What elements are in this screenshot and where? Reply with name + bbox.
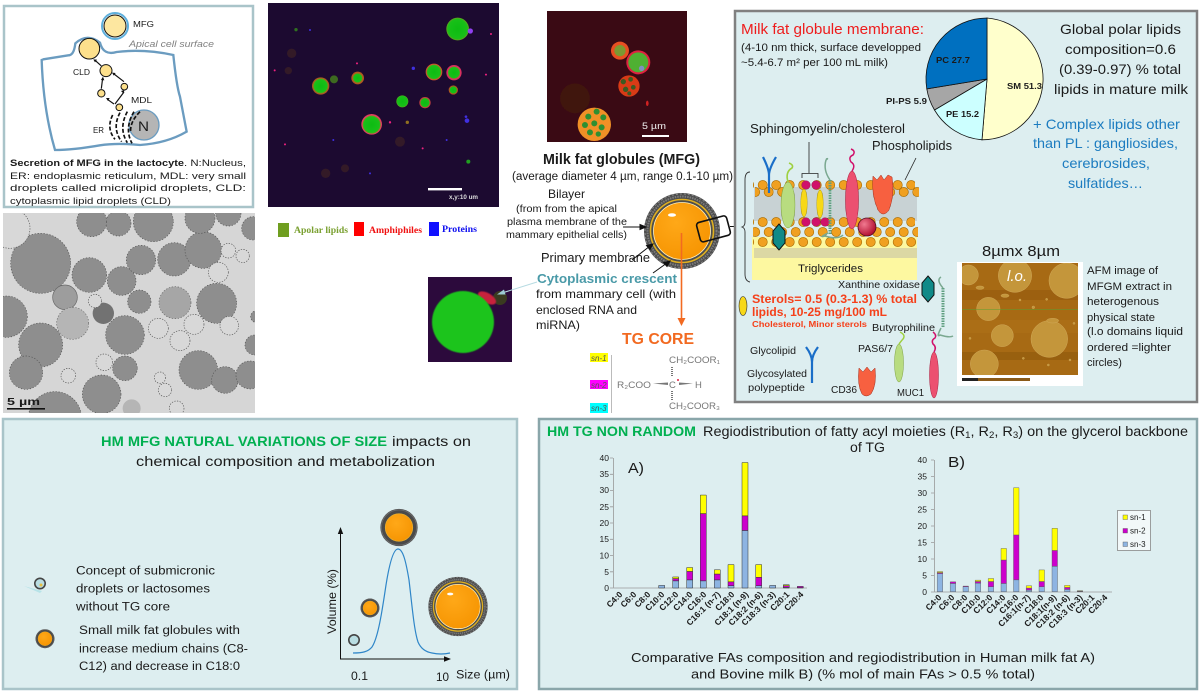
text: membrane facts	[741, 42, 921, 69]
chart B: bovine milk: 35	[918, 472, 927, 482]
heading: TG non random: HM TG NON RANDOM	[547, 424, 696, 439]
key: membrane proteins: MUC1	[897, 387, 924, 399]
diagram: triglyceride stereo formula	[590, 353, 720, 413]
chart B: bovine milk: C18:1(n-9)	[1022, 592, 1059, 629]
heading: TG non random: of TG	[850, 440, 885, 455]
text: AFM caption: physical state	[1087, 312, 1155, 324]
chart A: human milk fat: C12:0	[657, 589, 681, 613]
text: chart footnote	[631, 650, 1095, 682]
text: AFM caption: AFM image of	[1087, 265, 1159, 277]
icon: small milk fat globule	[36, 629, 54, 648]
text: chart footnote: and Bovine milk B) (% mol of main FAs > 0.5 % total)	[691, 666, 1035, 682]
key: membrane proteins: PAS6/7	[858, 343, 893, 355]
chart: size distribution: 10	[436, 672, 449, 684]
bracket	[742, 172, 750, 282]
heading: membrane: Milk fat globule membrane:	[741, 21, 924, 38]
heading: TG non random	[547, 424, 1188, 455]
text: membrane facts: ~5.4-6.7 m² per 100 mL milk)	[741, 57, 888, 69]
labels: cell parts: N	[138, 118, 149, 134]
heading: variations of size: HM MFG NATURAL VARIATIONS OF SIZE	[101, 434, 387, 449]
chart B: bovine milk: 20	[918, 521, 927, 531]
chart B: bovine milk: C10:0	[959, 592, 983, 616]
heading: variations of size: impacts on	[392, 434, 471, 449]
text: AFM caption: MFGM extract in	[1087, 281, 1172, 293]
text: small globules: increase medium chains (C8-	[79, 644, 248, 656]
icon: released milk fat globule: MFG	[133, 19, 154, 29]
diagram: triglyceride stereo formula: sn-3	[591, 404, 607, 413]
globule: submicronic	[349, 635, 359, 645]
chart A: human milk fat: C20:1	[768, 589, 792, 613]
labels: membrane components: Phospholipids	[872, 139, 952, 153]
heading: TG core: TG CORE	[622, 331, 694, 348]
text: small globules	[79, 625, 248, 673]
chart A: human milk fat: 35	[600, 469, 609, 479]
chart A: human milk fat: 20	[600, 518, 609, 528]
chart: size distribution: Size (µm)	[456, 670, 510, 682]
text: cytoplasmic crescent: enclosed RNA and	[536, 303, 637, 317]
chart A: human milk fat: C14:0	[671, 589, 695, 613]
labels: bilayer: plasma membrane of the	[507, 216, 627, 228]
pie chart: polar lipids: SM 51.3	[1007, 81, 1042, 91]
chart A: human milk fat: C18:0	[713, 589, 737, 613]
labels: bilayer: Bilayer	[548, 187, 585, 201]
chart A: human milk fat: C10:0	[643, 589, 667, 613]
chart B: bovine milk: B)	[948, 454, 965, 471]
key: membrane proteins: Xanthine oxidase	[838, 279, 920, 291]
icon: released milk fat globule	[102, 13, 154, 39]
legend: apolar lipids, amphiphiles, proteins: Apolar lipids	[294, 226, 348, 236]
PAS6/7 protein	[781, 163, 795, 228]
chart B: bovine milk: C20:4	[1086, 592, 1110, 616]
icon: submicronic droplet	[24, 578, 45, 593]
diagram: triglyceride stereo formula: H	[695, 380, 702, 391]
key: membrane proteins	[747, 276, 953, 399]
chart B: bovine milk: C8:0	[949, 592, 970, 612]
diagram: triglyceride stereo formula: sn-2	[591, 381, 607, 390]
diagram: triglyceride stereo formula: C	[669, 380, 676, 391]
confocal image: large field	[268, 3, 499, 207]
chart B: bovine milk: C14:0	[984, 592, 1008, 616]
heading: TG non random: , R	[994, 424, 1013, 439]
chart A: human milk fat: 25	[600, 502, 609, 512]
heading: TG non random: 3	[1013, 430, 1018, 440]
labels: cell parts: CLD	[73, 67, 90, 77]
legend: apolar lipids, amphiphiles, proteins	[278, 222, 477, 237]
text: AFM caption: ordered =lighter	[1087, 342, 1171, 354]
chart A: human milk fat: A)	[628, 460, 644, 477]
sphingomyelin heads	[802, 181, 829, 226]
AFM image	[957, 259, 1084, 386]
diagram: membrane bilayer: Triglycerides	[798, 263, 864, 275]
chart A: human milk fat: 5	[604, 567, 609, 577]
diagram: membrane bilayer	[752, 149, 919, 280]
text: complex lipids: than PL : gangliosides,	[1033, 135, 1178, 151]
cholesterol ovals	[801, 189, 823, 218]
text: small globules: Small milk fat globules with	[79, 625, 240, 637]
chart B: bovine milk: 15	[918, 538, 927, 548]
labels: bilayer: Primary membrane	[541, 251, 650, 265]
chart A: human milk fat: C18:1 (n-9)	[712, 589, 751, 627]
chart: size distribution: Volume (%)	[325, 569, 339, 634]
text: AFM caption: (l.o domains liquid	[1087, 326, 1183, 338]
globule: small	[360, 598, 380, 618]
text: cytoplasmic crescent: miRNA)	[536, 318, 580, 332]
chart A: human milk fat	[600, 453, 807, 627]
caption: Secretion of MFG in the lactocyte	[10, 158, 184, 169]
heading: milk fat globules: (average diameter 4 µm, range 0.1-10 µm)	[512, 171, 733, 183]
chart A: human milk fat: C16:0	[685, 589, 709, 613]
chart B: bovine milk: C18:0	[1022, 592, 1046, 616]
diagram: triglyceride stereo formula: R₂COO	[617, 380, 651, 391]
chart: size distribution	[325, 509, 510, 684]
scale bar: 5 µm: 5 µm	[642, 121, 666, 132]
pie chart: polar lipids: PI-PS 5.9	[886, 96, 927, 106]
heading: variations of size: chemical composition and metabolization	[136, 454, 435, 469]
text: submicronic droplets: without TG core	[75, 602, 170, 614]
labels: bilayer: mammary epithelial cells)	[506, 229, 627, 241]
chart A: human milk fat: C8:0	[632, 589, 653, 609]
arrow: to TG core	[678, 233, 686, 326]
chart A: human milk fat: 15	[600, 534, 609, 544]
heading: milk fat globules	[512, 151, 733, 183]
heading: milk fat globules: Milk fat globules (MFG)	[543, 151, 700, 168]
text: submicronic droplets: droplets or lactosomes	[76, 584, 210, 596]
small confocal image with crescent	[428, 277, 512, 362]
text: complex lipids	[1033, 116, 1180, 191]
pie chart: polar lipids: PC 27.7	[936, 55, 970, 65]
legend: apolar lipids, amphiphiles, proteins: Amphiphiles	[369, 226, 422, 236]
text: AFM caption	[1087, 265, 1183, 369]
text: complex lipids: + Complex lipids other	[1033, 116, 1180, 132]
key: membrane proteins: Butyrophiline	[872, 322, 935, 334]
text: submicronic droplets: Concept of submicronic	[76, 566, 215, 578]
chart A: human milk fat: 30	[600, 485, 609, 495]
xanthine oxidase	[773, 224, 785, 250]
chart B: bovine milk: 30	[918, 488, 927, 498]
text: cytoplasmic crescent: from mammary cell (with	[536, 287, 676, 301]
scale bar: 5 µm: 5 µm	[7, 396, 40, 408]
heading: variations of size	[101, 434, 471, 469]
electron micrograph	[3, 213, 255, 413]
arrows: membrane pointers	[623, 224, 670, 273]
text: small globules: C12) and decrease in C18:0	[79, 661, 240, 673]
chart A: human milk fat: C6:0	[618, 589, 639, 609]
chart B: bovine milk: 0	[922, 587, 927, 597]
key: membrane proteins: polypeptide	[748, 382, 805, 394]
chart B: bovine milk: 5	[922, 570, 927, 580]
heading: TG non random: Regiodistribution of fatty acyl moieties (R	[703, 424, 948, 439]
chart A: human milk fat: C18:2 (n-6)	[726, 589, 765, 627]
caption: cytoplasmic lipid droplets (CLD)	[10, 196, 171, 207]
heading: TG non random: ) on the glycerol backbone	[1018, 424, 1188, 439]
confocal image: globules with red membrane	[547, 11, 687, 142]
red protein	[858, 218, 876, 236]
chart A: human milk fat: C16:1 (n-7)	[684, 589, 723, 627]
chart A: human milk fat: 10	[600, 550, 609, 560]
text: cytoplasmic crescent: Cytoplasmic crescent	[537, 272, 678, 286]
scale bar: 5 µm	[7, 398, 45, 410]
text: membrane facts: (4-10 nm thick, surface developped	[741, 42, 921, 54]
labels: cell parts: ER	[93, 125, 104, 135]
zoom box and connector to membrane	[696, 215, 745, 243]
chart B: bovine milk: 40	[918, 455, 927, 465]
text: global polar lipids	[1054, 21, 1189, 97]
legend: apolar lipids, amphiphiles, proteins: Proteins	[442, 225, 477, 235]
scale bar: 10 µm: x,y:10 um	[449, 195, 478, 201]
diagram: milk fat globule cross section	[644, 193, 720, 269]
labels: cell parts: MDL	[131, 95, 152, 105]
text: sterols: Sterols= 0.5 (0.3-1.3) % total	[752, 294, 917, 306]
text: global polar lipids: Global polar lipids	[1060, 21, 1181, 37]
diagram: lactocyte cell	[42, 38, 187, 150]
butyrophilin	[822, 159, 843, 238]
text: AFM caption: heterogenous	[1087, 296, 1160, 308]
text: global polar lipids: (0.39-0.97) % total	[1059, 61, 1181, 77]
legend: sn positions	[1118, 510, 1150, 550]
panel: natural variations of size	[3, 419, 517, 689]
labels: cell parts	[73, 67, 152, 135]
legend: sn positions: sn-2	[1130, 526, 1146, 536]
chart B: bovine milk: C16:0	[997, 592, 1021, 616]
labels: bilayer	[506, 187, 650, 265]
chart B: bovine milk: C12:0	[971, 592, 995, 616]
diagram: triglyceride stereo formula: CH₂COOR₃	[669, 401, 720, 412]
legend: sn positions: sn-1	[1130, 513, 1146, 522]
heading: TG non random: , R	[971, 424, 989, 439]
caption: droplets called microlipid droplets, CLD:	[10, 183, 246, 194]
diagram: triglyceride stereo formula: sn-1	[591, 354, 607, 363]
text: complex lipids: cerebrosides,	[1062, 155, 1150, 171]
glycosylated polypeptide	[763, 157, 776, 193]
CD36	[873, 175, 893, 214]
MUC1	[846, 149, 858, 229]
text: complex lipids: sulfatides…	[1068, 175, 1143, 191]
chart: size distribution: 0.1	[351, 671, 368, 683]
heading: TG non random: 2	[989, 430, 994, 440]
chart A: human milk fat: C20:4	[782, 589, 806, 613]
heading: AFM size: 8µmx 8µm	[982, 243, 1060, 260]
text: chart footnote: Comparative FAs composition and regiodistribution in Human milk fat A)	[631, 650, 1095, 665]
text: global polar lipids: lipids in mature milk	[1054, 81, 1189, 97]
labels: membrane components	[750, 122, 952, 180]
text: sterols: Cholesterol, Minor sterols	[752, 319, 867, 329]
text: sterols: lipids, 10-25 mg/100 mL	[752, 307, 887, 319]
pie chart: polar lipids: PE 15.2	[946, 109, 979, 119]
chart A: human milk fat: C18:3 (n-3)	[739, 589, 778, 627]
chart B: bovine milk: 10	[918, 554, 927, 564]
scale bar: 10 µm	[428, 188, 478, 201]
chart B: bovine milk: C20:1	[1073, 592, 1097, 616]
chart B: bovine milk: C4:0	[923, 592, 944, 612]
chart B: bovine milk: C6:0	[936, 592, 957, 612]
chart B: bovine milk: C16:1(n-7)	[996, 592, 1033, 629]
arrow: crescent pointer	[497, 282, 537, 294]
panel: secretion in the lactocyte	[4, 6, 253, 207]
text: AFM caption: circles)	[1087, 357, 1122, 369]
caption: ER: endoplasmic reticulum, MDL: very small	[10, 171, 246, 182]
chart A: human milk fat: 40	[600, 453, 609, 463]
chart A: human milk fat: 0	[604, 583, 609, 593]
diagram: triglyceride stereo formula: CH₂COOR₁	[669, 355, 720, 366]
text: sterols	[739, 294, 917, 329]
panel: milk fat globule membrane	[735, 11, 1197, 402]
text: submicronic droplets	[75, 566, 215, 614]
caption: . N:Nucleus,	[184, 158, 246, 169]
chart B: bovine milk: 25	[918, 504, 927, 514]
caption	[10, 158, 246, 207]
key: membrane proteins: Glycosylated	[747, 368, 807, 380]
labels: bilayer: (from from the apical	[516, 203, 617, 215]
chart B: bovine milk	[918, 454, 1112, 630]
AFM image: l.o.	[1007, 268, 1027, 285]
legend: sn positions: sn-3	[1130, 540, 1146, 549]
labels: membrane components: Sphingomyelin/cholesterol	[750, 122, 905, 136]
pie chart: polar lipids	[886, 18, 1043, 140]
key: membrane proteins: Glycolipid	[750, 345, 796, 357]
heading: TG non random: 1	[965, 430, 971, 440]
panel: TG non random	[539, 419, 1197, 689]
text: cytoplasmic crescent	[536, 272, 678, 332]
chart B: bovine milk: C18:3 (n-3)	[1046, 592, 1085, 630]
key: membrane proteins: CD36	[831, 384, 857, 396]
globule: medium peak	[380, 509, 418, 546]
chart A: human milk fat: C4:0	[604, 589, 625, 609]
label: apical cell surface: Apical cell surface	[128, 39, 214, 49]
globule: large	[428, 577, 488, 636]
chart B: bovine milk: C18:2 (n-6)	[1033, 592, 1072, 630]
text: global polar lipids: composition=0.6	[1065, 41, 1176, 57]
